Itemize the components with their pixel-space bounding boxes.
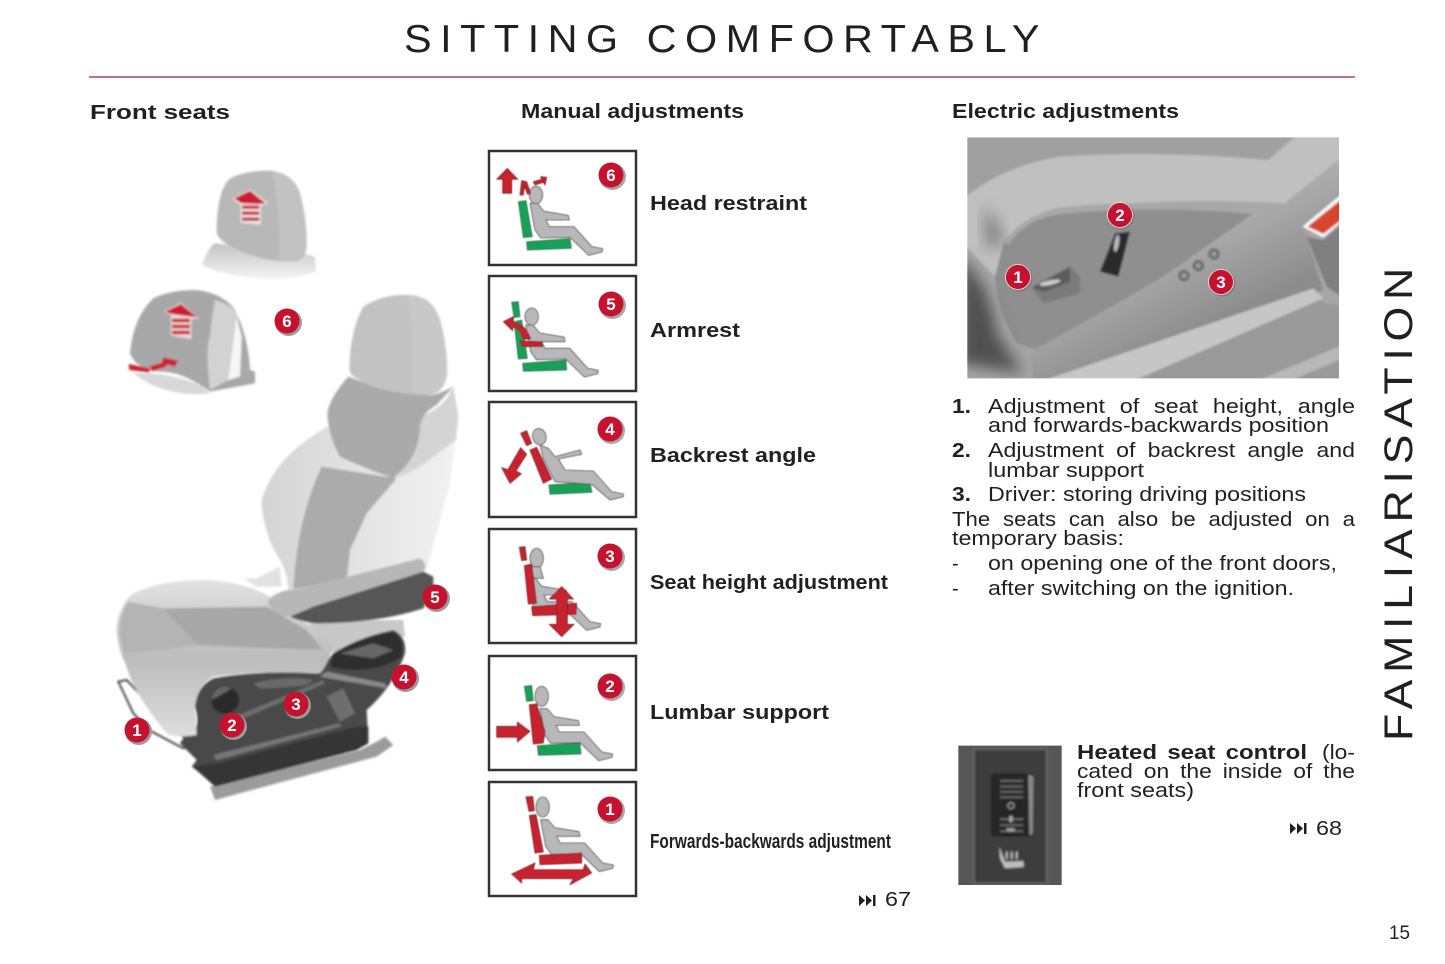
badge 4: [392, 664, 419, 692]
badge 5: [422, 584, 450, 612]
text block: electric adjustment list: -: [952, 578, 959, 600]
seat upper back: [261, 295, 458, 590]
badge 6: [274, 308, 302, 336]
text block: electric adjustment list: and forwards-backwards position: [988, 415, 1329, 437]
text block: electric adjustment list: lumbar support: [988, 460, 1145, 482]
head restraint raised views: [129, 171, 316, 394]
side title: familiarisation: FAMILIARISATION: [1377, 261, 1421, 741]
text block: electric adjustment list: [952, 396, 1356, 600]
page reference 68: 68: [1316, 818, 1342, 840]
seat lower: cushion, armrest, mechanism, rails: [117, 558, 433, 800]
badge 2: 2: [1115, 206, 1125, 225]
text block: electric adjustment list: Driver: storing driving positions: [988, 484, 1306, 506]
badge 2: [1108, 202, 1134, 230]
text block: heated seat control: [1077, 742, 1355, 802]
panel: armrest icon: 5: [606, 295, 616, 314]
label: backrest angle: Backrest angle: [650, 445, 816, 467]
heading: front seats: Front seats: [90, 102, 230, 124]
badge 4: 4: [399, 668, 409, 687]
text block: heated seat control: Heated seat control: [1077, 742, 1307, 764]
badge 2: [220, 712, 247, 740]
badge 3: 3: [291, 695, 301, 714]
panel: armrest icon: [489, 276, 636, 391]
photo: electric seat controls: [960, 130, 1347, 387]
text block: electric adjustment list: Adjustment of backrest angle and: [988, 440, 1355, 462]
text block: electric adjustment list: on opening one of the front doors,: [988, 553, 1337, 575]
label: head restraint: Head restraint: [650, 193, 807, 215]
heading: manual adjustments: Manual adjustments: [521, 101, 744, 123]
panel: forwards-backwards icon: 1: [605, 800, 615, 819]
text block: electric adjustment list: temporary basis:: [952, 528, 1124, 550]
text block: electric adjustment list: 3.: [952, 484, 971, 506]
text block: electric adjustment list: after switching on the ignition.: [988, 578, 1294, 600]
text block: heated seat control: front seats): [1077, 780, 1194, 802]
panel: seat height icon: 3: [605, 547, 615, 566]
text block: electric adjustment list: Adjustment of seat height, angle: [988, 396, 1355, 418]
badge 2: 2: [227, 716, 237, 735]
badge 1: [124, 718, 152, 745]
panel: seat height icon: [489, 529, 636, 643]
photo: heated seat control: [958, 746, 1062, 885]
label: lumbar support: Lumbar support: [650, 702, 829, 724]
text block: electric adjustment list: 2.: [952, 440, 971, 462]
panel: forwards-backwards icon: [489, 782, 636, 896]
badge 6: 6: [282, 312, 292, 331]
page number: 15: [1389, 923, 1410, 944]
title: SITTING COMFORTABLY: [404, 18, 1048, 61]
page reference 68: [1290, 818, 1342, 840]
panel: backrest angle icon: 4: [605, 420, 615, 439]
panel: head restraint icon: 6: [606, 166, 616, 185]
badge 3: [284, 692, 311, 719]
badge 5: 5: [430, 588, 440, 607]
label: forwards-backwards adjustment: Forwards-backwards adjustment: [650, 831, 891, 853]
heading: electric adjustments: Electric adjustments: [952, 101, 1179, 123]
badge 3: 3: [1216, 273, 1226, 292]
badge 1: 1: [132, 721, 142, 740]
badge 1: [1006, 264, 1032, 292]
badge 1: 1: [1013, 268, 1023, 287]
label: seat height adjustment: Seat height adjustment: [650, 572, 888, 594]
text block: heated seat control: (lo-: [1322, 742, 1355, 764]
illustration: front seat with numbered controls: [117, 171, 458, 800]
panel: lumbar support icon: 2: [605, 677, 615, 696]
panel: lumbar support icon: [489, 656, 636, 770]
text block: heated seat control: cated on the inside of the: [1077, 761, 1355, 783]
text block: electric adjustment list: -: [952, 553, 959, 575]
panel: head restraint icon: [489, 151, 636, 265]
text block: electric adjustment list: The seats can also be adjusted on a: [952, 509, 1356, 531]
page reference 67: 67: [885, 889, 911, 911]
panel: backrest angle icon: [489, 402, 636, 517]
text block: electric adjustment list: 1.: [952, 396, 971, 418]
page reference 67: [859, 889, 911, 911]
badge 3: [1208, 270, 1236, 296]
label: armrest: Armrest: [650, 320, 740, 342]
